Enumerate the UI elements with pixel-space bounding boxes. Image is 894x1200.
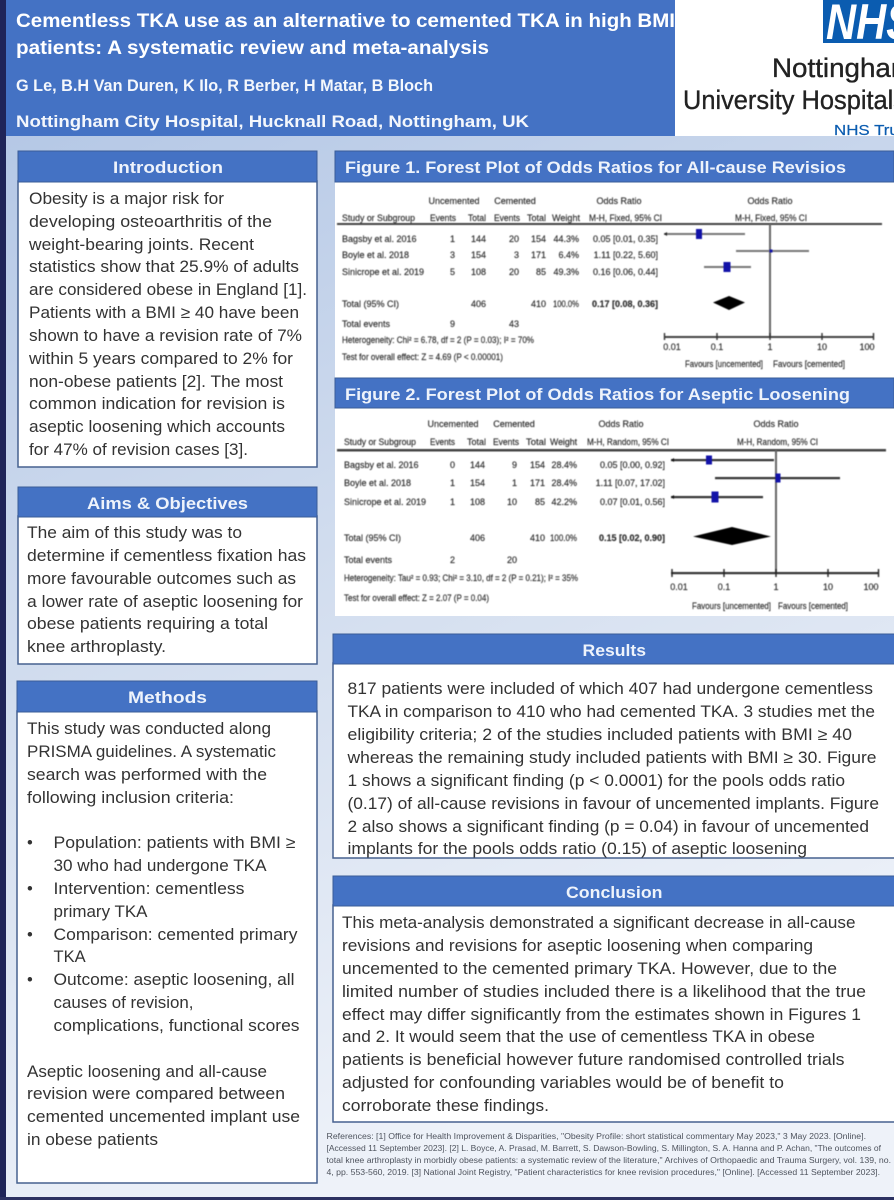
- forest plot table: aseptic loosening: Uncemented: [427, 419, 479, 429]
- inclusion criteria list: •: [27, 834, 33, 852]
- introduction text: [28, 190, 307, 459]
- panel: introduction: [18, 151, 317, 467]
- panel: results: [333, 634, 894, 858]
- forest plot table: aseptic loosening: 1: [450, 497, 455, 507]
- introduction text: weight-bearing joints. Recent: [28, 236, 254, 254]
- forest plot chart: aseptic loosening: 0.01: [670, 582, 688, 592]
- forest plot table: aseptic loosening: 154: [470, 478, 485, 488]
- forest plot chart: aseptic loosening: M-H, Random, 95% CI: [737, 437, 818, 447]
- aims text: more favourable outcomes such as: [27, 570, 296, 588]
- forest plot table: all-cause revisions: 6.4%: [558, 250, 579, 260]
- trust name: [683, 53, 894, 139]
- forest plot table: aseptic loosening: Test for overall effect: Z = 2.07 (P = 0.04): [344, 593, 489, 603]
- forest plot chart: all-cause revisions: Odds Ratio: [747, 196, 793, 206]
- introduction text: developing osteoarthritis of the: [29, 213, 272, 231]
- forest plot chart: all-cause revisions: Favours [cemented]: [773, 359, 845, 369]
- authors: G Le, B.H Van Duren, K Ilo, R Berber, H Matar, B Bloch: [16, 76, 433, 95]
- forest plot chart: aseptic loosening: 1: [773, 582, 779, 592]
- forest plot table: all-cause revisions: 108: [471, 267, 486, 277]
- forest plot table: all-cause revisions: Total (95% CI): [342, 299, 399, 309]
- inclusion criteria list: causes of revision,: [54, 994, 194, 1012]
- title: [16, 11, 675, 59]
- conclusion text: adjusted for confounding variables would be of benefit to: [342, 1074, 784, 1092]
- forest plot table: all-cause revisions: 1: [450, 234, 455, 244]
- forest plot table: aseptic loosening: M-H, Random, 95% CI: [587, 437, 669, 447]
- forest plot table: aseptic loosening: 10: [507, 497, 517, 507]
- forest plot chart: all-cause revisions: 1: [767, 342, 773, 352]
- conclusion text: and 2. It would seem that the use of cementless TKA in obese: [342, 1028, 815, 1046]
- conclusion text: corroborate these findings.: [342, 1097, 549, 1115]
- aims text: [27, 524, 306, 656]
- forest plot table: all-cause revisions: 144: [471, 234, 486, 244]
- forest plot table: aseptic loosening: 0.07 [0.01, 0.56]: [600, 497, 665, 507]
- results text: whereas the remaining study included patients with BMI ≥ 30. Figure: [346, 749, 877, 767]
- heading: methods: Methods: [128, 688, 207, 707]
- forest plot table: aseptic loosening: 20: [507, 555, 517, 565]
- references: [Accessed 11 September 2023]. [2] L. Boyce, A. Prasad, M. Barrett, S. Dawson-Bowling, S. Millington, S. A. Hanna and P. Achan, "The outcomes of: [326, 1144, 882, 1153]
- forest plot table: all-cause revisions: Boyle et al. 2018: [342, 250, 409, 260]
- forest plot table: aseptic loosening: 406: [470, 533, 485, 543]
- introduction text: for 47% of revision cases [3].: [29, 441, 248, 459]
- forest plot table: all-cause revisions: Sinicrope et al. 2019: [342, 267, 424, 277]
- references: [326, 1132, 891, 1177]
- forest plot chart: aseptic loosening: Favours [uncemented]: [692, 601, 771, 611]
- title: patients: A systematic review and meta-analysis: [16, 38, 489, 59]
- forest plot table: aseptic loosening: Weight: [550, 437, 577, 447]
- forest plot chart: aseptic loosening: 10: [823, 582, 833, 592]
- forest plot table: all-cause revisions: Test for overall effect: Z = 4.69 (P < 0.00001): [342, 352, 503, 362]
- results text: 2 also shows a significant finding (p = 0.04) in favour of uncemented: [348, 818, 869, 836]
- panel: figure 2: [335, 378, 894, 616]
- panel: aims and objectives: [18, 487, 317, 664]
- header banner: [6, 0, 675, 136]
- forest plot table: aseptic loosening: Sinicrope et al. 2019: [344, 497, 426, 507]
- heading: introduction: Introduction: [113, 158, 223, 177]
- forest plot table: all-cause revisions: Total: [468, 213, 486, 223]
- introduction text: Obesity is a major risk for: [29, 190, 225, 208]
- forest plot table: all-cause revisions: 171: [531, 250, 546, 260]
- conclusion text: uncemented to the cemented primary TKA. However, due to the: [342, 960, 837, 978]
- forest plot table: all-cause revisions: Uncemented: [428, 196, 480, 206]
- forest plot table: all-cause revisions: 3: [514, 250, 519, 260]
- forest plot table: aseptic loosening: 9: [512, 460, 517, 470]
- forest plot table: all-cause revisions: M-H, Fixed, 95% CI: [589, 213, 662, 223]
- conclusion text: [342, 914, 866, 1115]
- forest plot table: all-cause revisions: Total events: [342, 319, 391, 329]
- forest plot table: all-cause revisions: 0.16 [0.06, 0.44]: [593, 267, 658, 277]
- forest plot table: all-cause revisions: Odds Ratio: [596, 196, 642, 206]
- results text: 1 shows a significant finding (p < 0.0001) for the pools odds ratio: [348, 772, 845, 790]
- forest plot table: aseptic loosening: Total (95% CI): [344, 533, 401, 543]
- forest plot table: all-cause revisions: Total: [527, 213, 546, 223]
- forest plot table: aseptic loosening: 1.11 [0.07, 17.02]: [596, 478, 665, 488]
- methods intro text: This study was conducted along: [27, 720, 271, 738]
- forest plot table: aseptic loosening: 100.0%: [550, 533, 577, 543]
- forest plot table: aseptic loosening: 85: [535, 497, 545, 507]
- forest plot table: all-cause revisions: 0.17 [0.08, 0.36]: [592, 299, 658, 309]
- inclusion criteria list: [27, 834, 300, 1035]
- forest plot table: aseptic loosening: Cemented: [493, 419, 535, 429]
- forest plot table: aseptic loosening: 144: [470, 460, 485, 470]
- forest plot table: all-cause revisions: 20: [509, 267, 519, 277]
- title: Cementless TKA use as an alternative to cemented TKA in high BMI: [16, 11, 675, 32]
- forest plot table: aseptic loosening: Odds Ratio: [598, 419, 644, 429]
- results text: [346, 680, 879, 858]
- forest plot table: aseptic loosening: 2: [450, 555, 455, 565]
- aims text: determine if cementless fixation has: [27, 547, 306, 565]
- inclusion criteria list: complications, functional scores: [54, 1017, 300, 1035]
- forest plot table: aseptic loosening: Boyle et al. 2018: [344, 478, 411, 488]
- forest plot table: aseptic loosening: 0.05 [0.00, 0.92]: [600, 460, 665, 470]
- forest plot table: aseptic loosening: 154: [530, 460, 545, 470]
- forest plot table: all-cause revisions: 49.3%: [553, 267, 579, 277]
- forest plot table: aseptic loosening: Total events: [344, 555, 393, 565]
- results text: (0.17) of all-cause revisions in favour of uncemented implants. Figure: [348, 795, 879, 813]
- forest plot table: all-cause revisions: 43: [509, 319, 519, 329]
- forest plot chart: all-cause revisions: Favours [uncemented]: [685, 359, 763, 369]
- forest plot table: all-cause revisions: Study or Subgroup: [342, 213, 415, 223]
- aims text: The aim of this study was to: [27, 524, 242, 542]
- methods closing text: cemented uncemented implant use: [27, 1108, 300, 1126]
- forest plot table: aseptic loosening: 108: [470, 497, 485, 507]
- inclusion criteria list: •: [27, 971, 33, 989]
- forest plot table: aseptic loosening: Events: [430, 437, 455, 447]
- forest plot table: aseptic loosening: 28.4%: [551, 460, 577, 470]
- forest plot chart: all-cause revisions: M-H, Fixed, 95% CI: [735, 213, 807, 223]
- forest plot chart: all-cause revisions: 10: [817, 342, 827, 352]
- forest plot table: aseptic loosening: Total: [467, 437, 486, 447]
- forest plot table: all-cause revisions: 9: [450, 319, 455, 329]
- forest plot chart: all-cause revisions: 0.1: [711, 342, 723, 352]
- references: 4, pp. 553-560, 2019. [3] National Joint Registry, "Patient characteristics for knee revision procedures," [Online]. [Accessed 11 September 2023].: [326, 1168, 880, 1177]
- forest plot chart: aseptic loosening: Favours [cemented]: [778, 601, 848, 611]
- introduction text: non-obese patients [2]. The most: [29, 373, 283, 391]
- conclusion text: This meta-analysis demonstrated a significant decrease in all-cause: [342, 914, 856, 932]
- aims text: a lower rate of aseptic loosening for: [27, 593, 304, 611]
- heading: figure 1: Figure 1. Forest Plot of Odds Ratios for All-cause Revisios: [345, 158, 846, 177]
- panel: figure 1: [335, 151, 894, 378]
- inclusion criteria list: 30 who had undergone TKA: [54, 857, 266, 875]
- methods intro text: [27, 720, 276, 807]
- forest plot chart: aseptic loosening: 100: [863, 582, 879, 592]
- forest plot table: all-cause revisions: 154: [531, 234, 546, 244]
- forest plot table: all-cause revisions: 100.0%: [553, 299, 579, 309]
- methods intro text: search was performed with the: [27, 766, 267, 784]
- conclusion text: effect may differ significantly from the estimates shown in Figures 1: [342, 1006, 861, 1024]
- methods intro text: PRISMA guidelines. A systematic: [27, 743, 276, 761]
- panel: methods: [17, 681, 317, 1183]
- forest plot chart: aseptic loosening: Odds Ratio: [753, 419, 799, 429]
- forest plot table: all-cause revisions: 410: [531, 299, 546, 309]
- introduction text: are considered obese in England [1].: [29, 281, 307, 299]
- forest plot table: all-cause revisions: 0.05 [0.01, 0.35]: [593, 234, 658, 244]
- aims text: knee arthroplasty.: [27, 638, 166, 656]
- methods closing text: Aseptic loosening and all-cause: [27, 1063, 267, 1081]
- inclusion criteria list: •: [27, 880, 33, 898]
- NHS logo block: [675, 0, 894, 139]
- methods closing text: revision were compared between: [27, 1085, 285, 1103]
- forest plot table: all-cause revisions: 3: [450, 250, 455, 260]
- forest plot chart: all-cause revisions: [663, 196, 875, 369]
- inclusion criteria list: Comparison: cemented primary: [54, 926, 298, 944]
- introduction text: Patients with a BMI ≥ 40 have been: [29, 304, 299, 322]
- forest plot chart: aseptic loosening: 0.1: [718, 582, 730, 592]
- heading: results: Results: [582, 641, 646, 660]
- forest plot table: all-cause revisions: Events: [494, 213, 520, 223]
- results text: TKA in comparison to 410 who had cemented TKA. 3 studies met the: [348, 703, 875, 721]
- forest plot table: aseptic loosening: 1: [450, 478, 455, 488]
- forest plot table: aseptic loosening: 28.4%: [551, 478, 577, 488]
- references: References: [1] Office for Health Improvement & Disparities, "Obesity Profile: short statistical commentary May 2023," 3 May 2023. [Online].: [326, 1132, 866, 1141]
- introduction text: common indication for revision is: [29, 395, 285, 413]
- forest plot table: all-cause revisions: [337, 196, 882, 362]
- forest plot table: all-cause revisions: Weight: [552, 213, 580, 223]
- inclusion criteria list: primary TKA: [54, 903, 148, 921]
- inclusion criteria list: TKA: [54, 948, 86, 966]
- forest plot chart: all-cause revisions: 0.01: [663, 342, 681, 352]
- heading: figure 2: Figure 2. Forest Plot of Odds Ratios for Aseptic Loosening: [345, 385, 850, 404]
- forest plot chart: all-cause revisions: 100: [859, 342, 875, 352]
- panel: conclusion: [333, 876, 894, 1122]
- forest plot table: all-cause revisions: 44.3%: [553, 234, 579, 244]
- inclusion criteria list: •: [27, 926, 33, 944]
- inclusion criteria list: Population: patients with BMI ≥: [54, 834, 296, 852]
- forest plot table: all-cause revisions: 406: [471, 299, 486, 309]
- inclusion criteria list: Intervention: cementless: [54, 880, 244, 898]
- results text: 817 patients were included of which 407 had undergone cementless: [348, 680, 873, 698]
- forest plot table: all-cause revisions: Bagsby et al. 2016: [342, 234, 417, 244]
- forest plot table: aseptic loosening: [337, 419, 886, 603]
- conclusion text: patients is beneficial however future randomised controlled trials: [342, 1051, 844, 1069]
- forest plot table: aseptic loosening: 171: [530, 478, 545, 488]
- forest plot table: all-cause revisions: 5: [450, 267, 455, 277]
- results text: implants for the pools odds ratio (0.15) of aseptic loosening: [348, 840, 807, 858]
- forest plot table: aseptic loosening: Events: [493, 437, 519, 447]
- aims text: obese patients requiring a total: [27, 615, 268, 633]
- introduction text: shown to have a revision rate of 7%: [29, 327, 302, 345]
- forest plot table: all-cause revisions: Heterogeneity: Chi² = 6.78, df = 2 (P = 0.03); I² = 70%: [342, 335, 534, 345]
- forest plot table: all-cause revisions: 154: [471, 250, 486, 260]
- introduction text: aseptic loosening which accounts: [29, 418, 285, 436]
- methods intro text: following inclusion criteria:: [27, 789, 234, 807]
- forest plot table: all-cause revisions: 1.11 [0.22, 5.60]: [594, 250, 658, 260]
- forest plot table: aseptic loosening: Study or Subgroup: [344, 437, 416, 447]
- forest plot table: aseptic loosening: Heterogeneity: Tau² = 0.93; Chi² = 3.10, df = 2 (P = 0.21); I² = 35%: [344, 573, 578, 583]
- methods closing text: in obese patients: [27, 1131, 158, 1149]
- heading: conclusion: Conclusion: [566, 883, 662, 902]
- forest plot table: aseptic loosening: Total: [526, 437, 546, 447]
- forest plot chart: aseptic loosening: [670, 419, 879, 611]
- references: total knee arthroplasty in morbidly obese patients: a systematic review of the literature," Archives of Orthopaedic and Trauma Surgery, vol. 139, no.: [326, 1156, 891, 1165]
- forest plot table: all-cause revisions: Cemented: [494, 196, 536, 206]
- forest plot table: aseptic loosening: 1: [512, 478, 517, 488]
- heading: aims and objectives: Aims & Objectives: [87, 494, 248, 513]
- forest plot table: all-cause revisions: 20: [509, 234, 519, 244]
- forest plot table: aseptic loosening: 42.2%: [551, 497, 577, 507]
- results text: eligibility criteria; 2 of the studies included patients with BMI ≥ 40: [348, 726, 852, 744]
- forest plot table: aseptic loosening: 410: [530, 533, 545, 543]
- methods closing text: [27, 1063, 300, 1149]
- forest plot table: all-cause revisions: Events: [430, 213, 456, 223]
- forest plot table: aseptic loosening: 0: [450, 460, 455, 470]
- forest plot table: all-cause revisions: 85: [536, 267, 546, 277]
- inclusion criteria list: Outcome: aseptic loosening, all: [54, 971, 294, 989]
- affiliation: Nottingham City Hospital, Hucknall Road, Nottingham, UK: [16, 112, 530, 131]
- introduction text: statistics show that 25.9% of adults: [29, 258, 299, 276]
- introduction text: within 5 years compared to 2% for: [28, 350, 294, 368]
- conclusion text: revisions and revisions for aseptic loosening when comparing: [342, 937, 813, 955]
- forest plot table: aseptic loosening: 0.15 [0.02, 0.90]: [599, 533, 665, 543]
- forest plot table: aseptic loosening: Bagsby et al. 2016: [344, 460, 419, 470]
- conclusion text: limited number of studies included there is a likelihood that the true: [342, 983, 866, 1001]
